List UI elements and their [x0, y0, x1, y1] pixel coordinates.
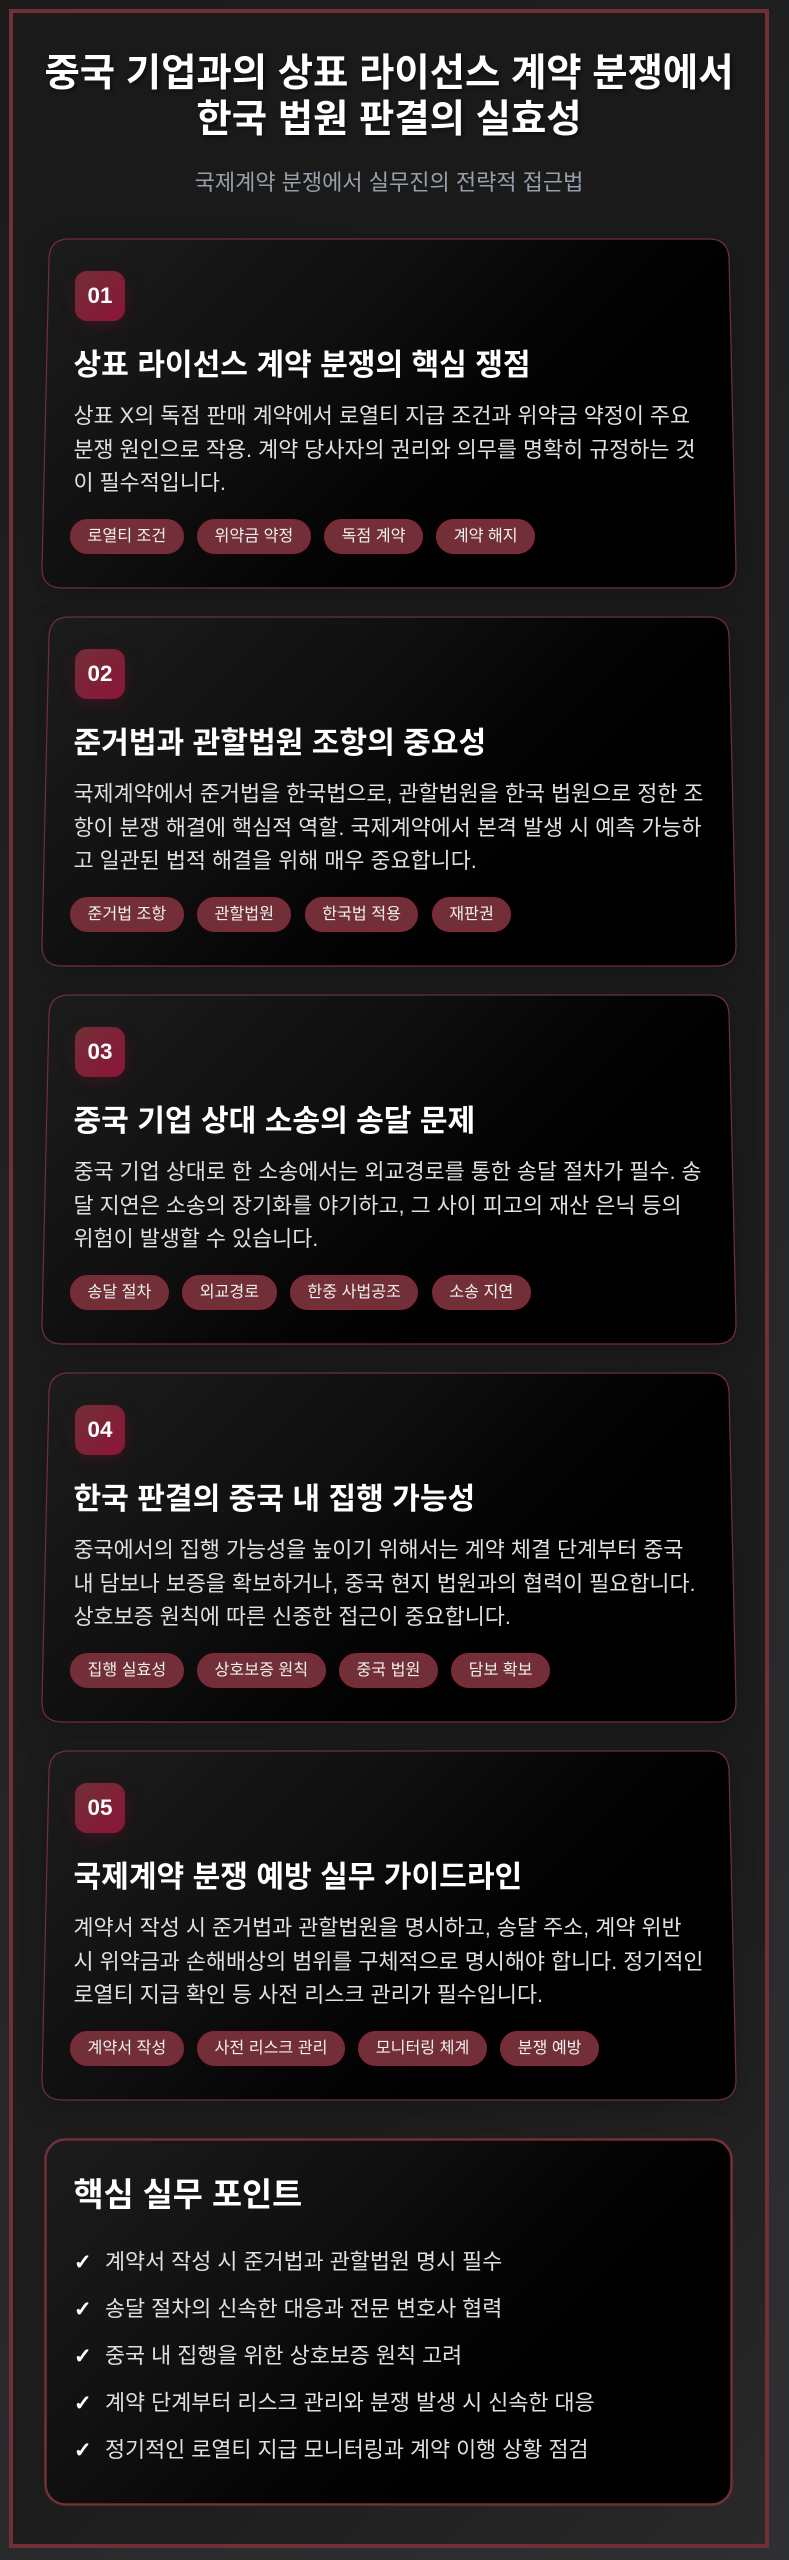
body text — [74, 1915, 704, 2007]
body text: 국제계약에서 준거법을 한국법으로, 관할법원을 한국 법원으로 정한 조 — [74, 781, 704, 806]
badge 04: 04 — [88, 1417, 112, 1442]
body text: 로열티 지급 확인 등 사전 리스크 관리가 필수입니다. — [74, 1982, 543, 2007]
tags: 송달 절차 — [88, 1283, 151, 1301]
body text: 상호보증 원칙에 따른 신중한 접근이 중요합니다. — [74, 1604, 511, 1629]
tags — [70, 519, 535, 554]
tags: 한국법 적용 — [322, 905, 401, 923]
checklist item 3: 중국 내 집행을 위한 상호보증 원칙 고려 — [105, 2343, 462, 2368]
heading: 상표 라이선스 계약 분쟁의 핵심 쟁점 — [74, 349, 531, 382]
badge 01: 01 — [88, 283, 112, 308]
heading: 국제계약 분쟁 예방 실무 가이드라인 — [74, 1861, 522, 1894]
body text — [74, 403, 696, 495]
badge 01 — [75, 271, 125, 321]
badge 05: 05 — [88, 1795, 112, 1820]
title: 중국 기업과의 상표 라이선스 계약 분쟁에서 — [44, 52, 734, 95]
checklist item 5: ✓ — [74, 2438, 92, 2462]
tags: 관할법원 — [215, 905, 274, 923]
heading: 한국 판결의 중국 내 집행 가능성 — [74, 1483, 475, 1516]
checklist item 4: ✓ — [74, 2391, 92, 2415]
heading: 핵심 실무 포인트 — [74, 2176, 302, 2213]
title: 한국 법원 판결의 실효성 — [196, 98, 582, 141]
checklist item 5: 정기적인 로열티 지급 모니터링과 계약 이행 상황 점검 — [105, 2437, 589, 2462]
tags: 사전 리스크 관리 — [215, 2039, 327, 2057]
tags — [70, 897, 511, 932]
body text: 시 위약금과 손해배상의 범위를 구체적으로 명시해야 합니다. 정기적인 — [74, 1948, 704, 1974]
checklist item 3: ✓ — [74, 2344, 92, 2368]
badge 02: 02 — [88, 661, 112, 686]
body text: 달 지연은 소송의 장기화를 야기하고, 그 사이 피고의 재산 은닉 등의 — [74, 1192, 682, 1218]
tags: 상호보증 원칙 — [215, 1661, 308, 1679]
checklist item 2: ✓ — [74, 2297, 92, 2321]
tags — [70, 2031, 599, 2066]
tags: 담보 확보 — [469, 1661, 532, 1679]
body text — [74, 1537, 696, 1629]
body text: 중국에서의 집행 가능성을 높이기 위해서는 계약 체결 단계부터 중국 — [74, 1537, 683, 1562]
badge 03: 03 — [88, 1039, 112, 1064]
checklist item 4: 계약 단계부터 리스크 관리와 분쟁 발생 시 신속한 대응 — [105, 2390, 595, 2415]
body text: 중국 기업 상대로 한 소송에서는 외교경로를 통한 송달 절차가 필수. 송 — [74, 1159, 702, 1184]
tags: 계약 해지 — [454, 527, 518, 545]
body text — [74, 781, 704, 873]
tags: 준거법 조항 — [88, 905, 166, 923]
panel: card 01 — [41, 238, 737, 589]
body text: 상표 X의 독점 판매 계약에서 로열티 지급 조건과 위약금 약정이 주요 — [74, 403, 690, 428]
body text: 이 필수적입니다. — [74, 470, 226, 495]
heading: 준거법과 관할법원 조항의 중요성 — [74, 727, 486, 760]
badge 05 — [75, 1783, 125, 1833]
tags: 소송 지연 — [449, 1283, 513, 1301]
tags — [70, 1653, 550, 1688]
tags: 로열티 조건 — [88, 527, 166, 545]
panel: key practical points — [44, 2138, 733, 2506]
badge 03 — [75, 1027, 125, 1077]
body text: 항이 분쟁 해결에 핵심적 역할. 국제계약에서 본격 발생 시 예측 가능하 — [74, 814, 702, 840]
tags: 모니터링 체계 — [376, 2039, 469, 2057]
body text: 고 일관된 법적 해결을 위해 매우 중요합니다. — [74, 848, 477, 873]
body text: 계약서 작성 시 준거법과 관할법원을 명시하고, 송달 주소, 계약 위반 — [74, 1915, 682, 1940]
tags: 독점 계약 — [342, 527, 405, 545]
badge 02 — [75, 649, 125, 699]
checklist item 1: ✓ — [74, 2250, 92, 2274]
body text — [74, 1159, 702, 1251]
checklist item 1: 계약서 작성 시 준거법과 관할법원 명시 필수 — [105, 2249, 502, 2274]
tags: 한중 사법공조 — [307, 1283, 401, 1301]
body text: 위험이 발생할 수 있습니다. — [74, 1226, 318, 1251]
heading: 중국 기업 상대 소송의 송달 문제 — [74, 1105, 475, 1138]
panel: card 02 — [41, 616, 737, 967]
tags: 위약금 약정 — [215, 527, 293, 545]
panel: card 04 — [41, 1372, 737, 1723]
panel: card 03 — [41, 994, 737, 1345]
tags: 계약서 작성 — [88, 2039, 166, 2057]
subtitle: 국제계약 분쟁에서 실무진의 전략적 접근법 — [195, 170, 583, 195]
tags — [70, 1275, 531, 1310]
badge 04 — [75, 1405, 125, 1455]
checklist item 2: 송달 절차의 신속한 대응과 전문 변호사 협력 — [105, 2296, 502, 2321]
tags: 분쟁 예방 — [518, 2039, 582, 2057]
tags: 외교경로 — [200, 1283, 259, 1301]
tags: 중국 법원 — [356, 1661, 420, 1679]
body text: 분쟁 원인으로 작용. 계약 당사자의 권리와 의무를 명확히 규정하는 것 — [74, 436, 696, 462]
title — [44, 52, 734, 141]
tags: 집행 실효성 — [88, 1661, 166, 1679]
tags: 재판권 — [449, 905, 494, 923]
panel: card 05 — [41, 1750, 737, 2101]
body text: 내 담보나 보증을 확보하거나, 중국 현지 법원과의 협력이 필요합니다. — [74, 1570, 696, 1596]
